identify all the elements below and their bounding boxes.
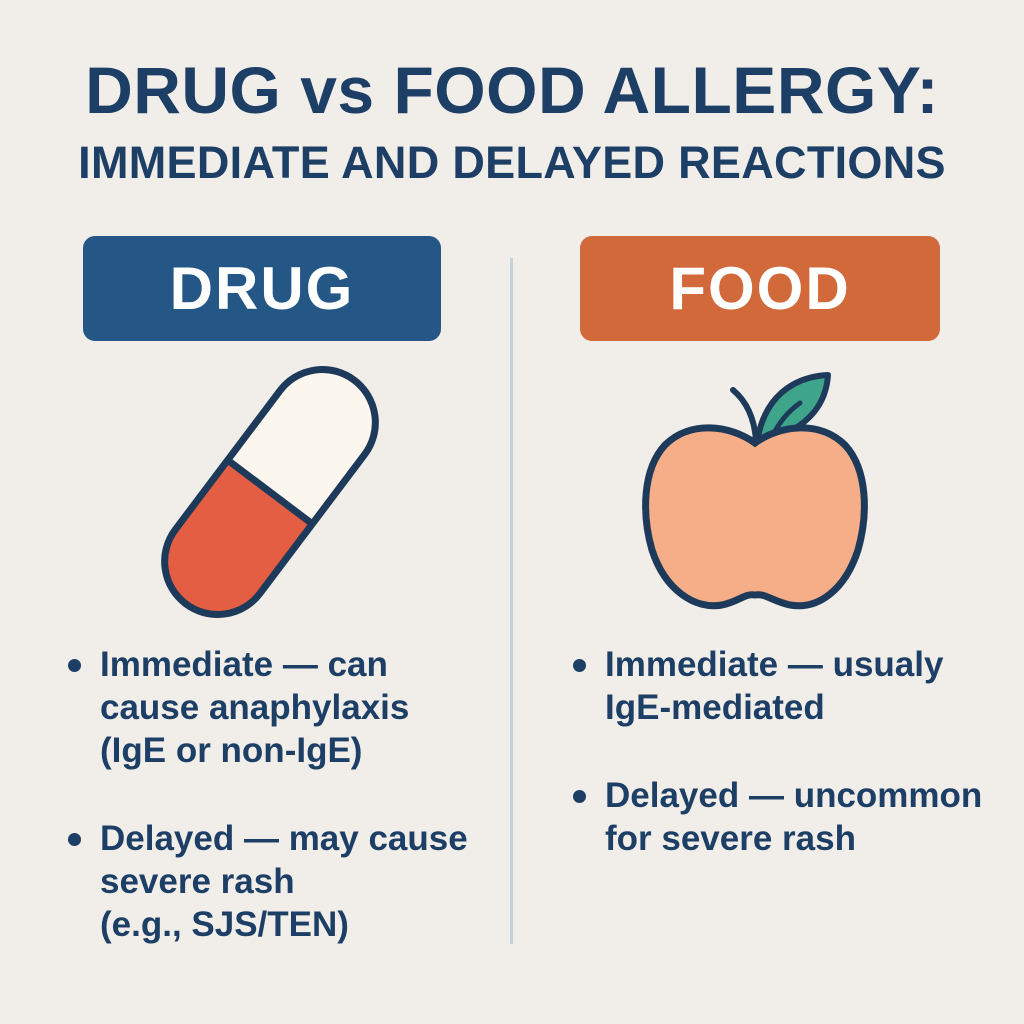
bullet: drug immediate: Immediate — can xyxy=(100,645,388,684)
bullet: drug delayed: Delayed — may cause xyxy=(100,819,468,858)
divider xyxy=(510,258,513,944)
bullet: food immediate: Immediate — usualy xyxy=(605,645,943,684)
button: food: FOOD xyxy=(669,255,851,322)
button: food xyxy=(580,236,940,341)
list: food xyxy=(573,645,982,858)
button: drug: DRUG xyxy=(170,255,354,322)
bullet: food delayed: Delayed — uncommon xyxy=(605,776,982,815)
bullet: food delayed: for severe rash xyxy=(605,819,856,858)
list: drug xyxy=(68,645,468,944)
bullet: drug delayed: (e.g., SJS/TEN) xyxy=(100,905,349,944)
icon: apple xyxy=(642,372,868,610)
bullet: drug immediate: (IgE or non-IgE) xyxy=(100,731,362,770)
icon: pill xyxy=(161,366,379,618)
bullet: drug delayed: severe rash xyxy=(100,862,295,901)
bullet: drug delayed xyxy=(68,817,498,946)
bullet: drug immediate xyxy=(68,643,498,772)
bullet: food immediate xyxy=(573,643,1013,729)
title: DRUG vs FOOD ALLERGY: xyxy=(85,53,939,127)
bullet: food delayed xyxy=(573,774,1013,860)
subtitle: IMMEDIATE AND DELAYED REACTIONS xyxy=(78,137,946,188)
bullet: drug immediate: cause anaphylaxis xyxy=(100,688,409,727)
button: drug xyxy=(83,236,441,341)
bullet: food immediate: IgE-mediated xyxy=(605,688,825,727)
